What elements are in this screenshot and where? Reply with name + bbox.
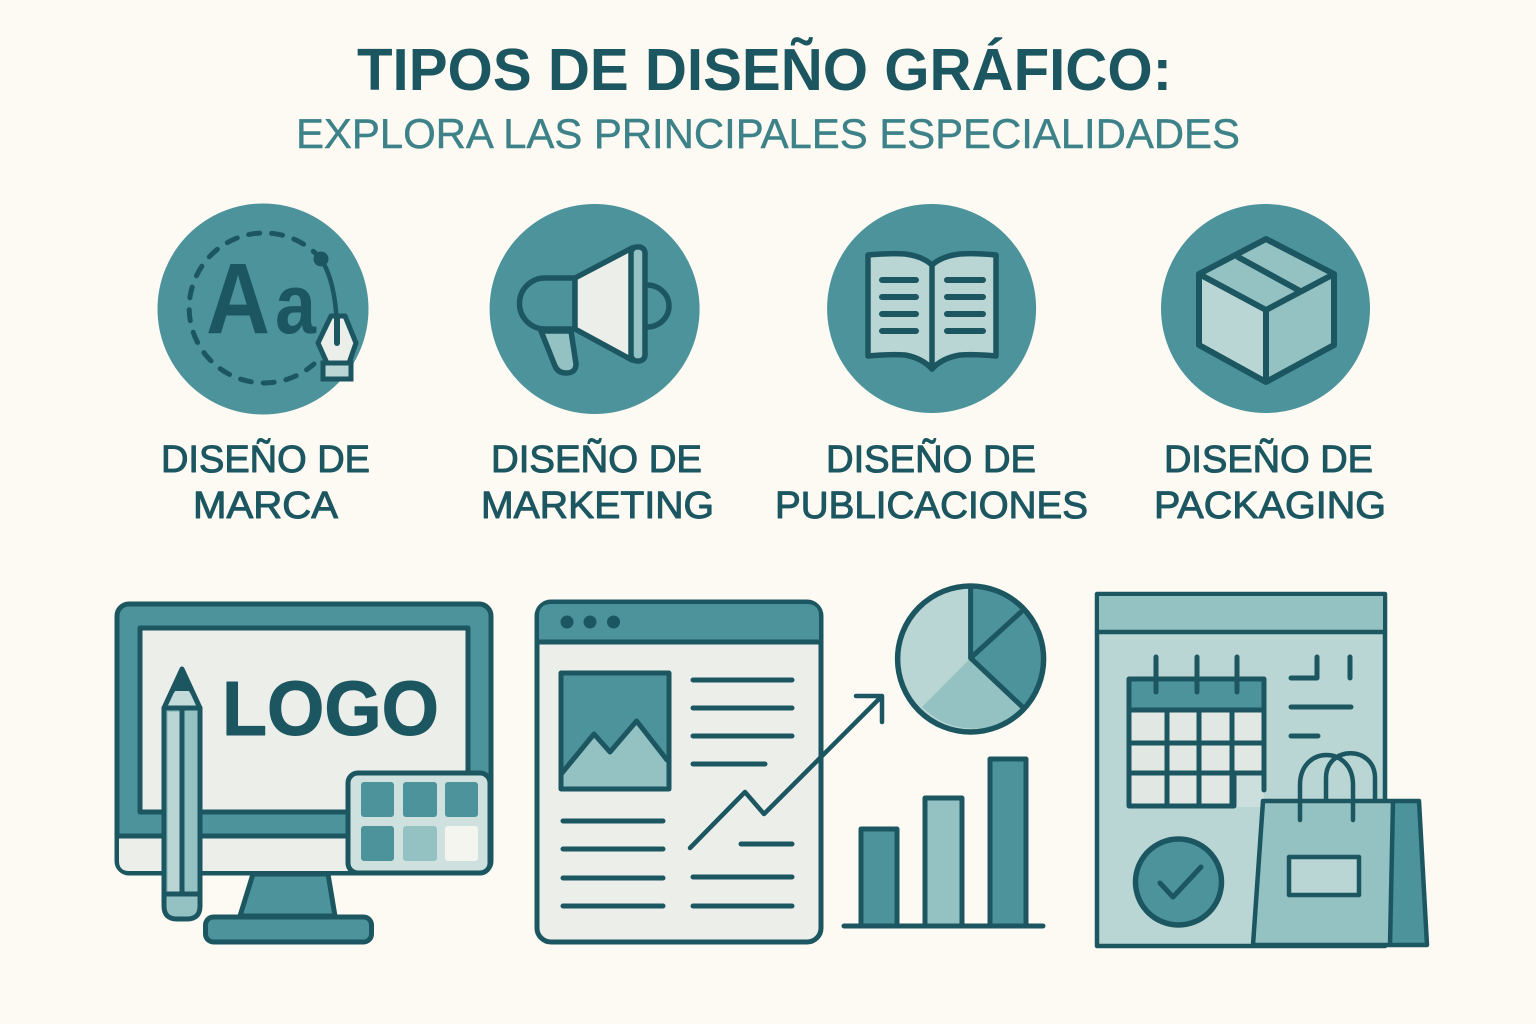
pencil [164, 669, 200, 919]
illustration: web layout window [537, 602, 821, 942]
label: diseño de marca: DISEÑO DE [161, 438, 370, 481]
illustration: shopping bag [1253, 753, 1427, 945]
sheet text lines [1291, 657, 1351, 736]
title: TIPOS DE DISEÑO GRÁFICO: [357, 37, 1172, 103]
icon text: Aa: A [206, 243, 270, 355]
label: diseño de marketing: DISEÑO DE [491, 438, 702, 481]
label: diseño de packaging: DISEÑO DE [1164, 438, 1373, 481]
check badge [1136, 839, 1222, 925]
bar chart [844, 759, 1043, 926]
arrow: growth line [690, 696, 882, 848]
logo text: LOGO [222, 666, 439, 752]
icon: megaphone circle [490, 204, 700, 414]
icon text: Aa [206, 243, 317, 355]
label: diseño de packaging: PACKAGING [1154, 485, 1386, 527]
icon: package box circle [1161, 204, 1370, 413]
label: diseño de publicaciones: DISEÑO DE [826, 438, 1036, 481]
label: diseño de marca: MARCA [193, 485, 339, 527]
image placeholder [561, 673, 669, 789]
label: diseño de publicaciones: PUBLICACIONES [775, 485, 1088, 527]
illustration: monitor with logo [117, 604, 491, 942]
icon: open book circle [827, 204, 1036, 413]
label: diseño de packaging [1154, 438, 1386, 527]
pie chart [898, 586, 1044, 732]
text lines [563, 680, 792, 906]
label: diseño de publicaciones [775, 438, 1088, 527]
icon: brand design circle [158, 204, 368, 414]
color palette [348, 773, 490, 873]
subtitle: EXPLORA LAS PRINCIPALES ESPECIALIDADES [296, 110, 1240, 157]
illustration: print sheet with calendar [1097, 594, 1385, 946]
calendar [1129, 657, 1264, 807]
label: diseño de marketing [481, 438, 714, 527]
label: diseño de marca [161, 438, 370, 527]
icon text: Aa: a [275, 257, 317, 351]
label: diseño de marketing: MARKETING [481, 485, 714, 527]
